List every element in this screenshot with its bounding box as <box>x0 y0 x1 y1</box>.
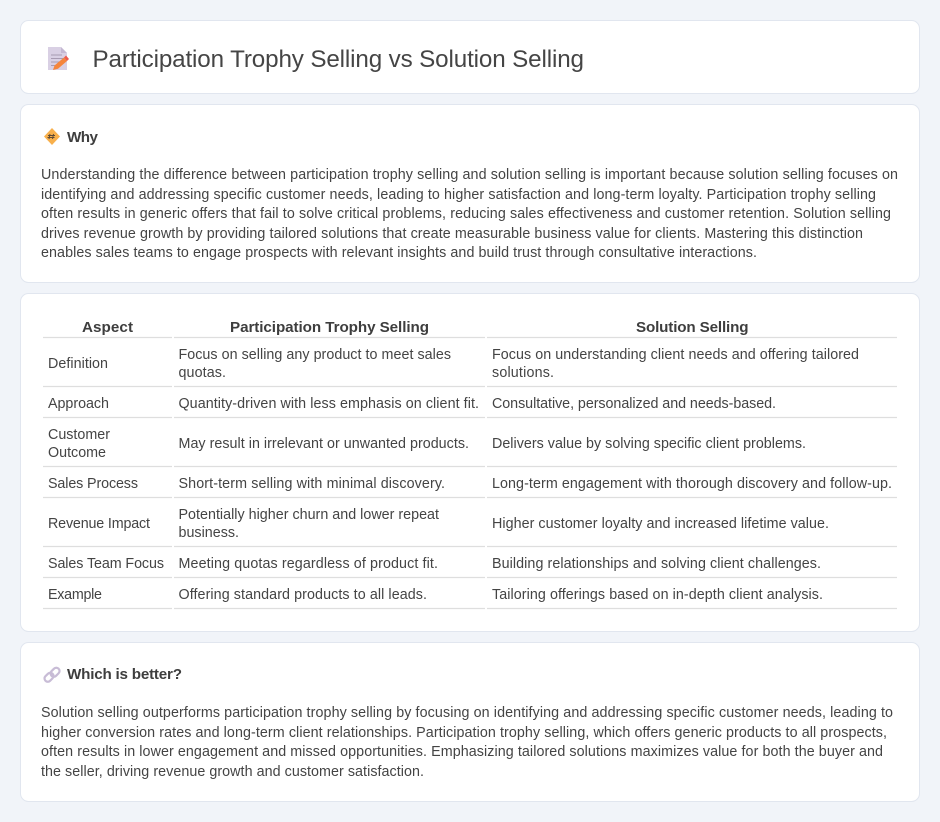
text block: why explanation <box>41 167 898 261</box>
text block: why explanation: identifying and addressing specific customer needs, leading to higher satisfaction and long-term loyalty. Participation trophy selling <box>41 187 876 203</box>
text block: verdict: Solution selling outperforms participation trophy selling by focusing on identifying and addressing specific customer needs, leading to <box>41 705 893 721</box>
icon: document with pencil <box>48 47 69 70</box>
panel: comparison table <box>20 294 920 632</box>
text block: why explanation: drives revenue growth by providing tailored solutions that create measurable business value for clients. Mastering this distinction <box>41 226 863 242</box>
row: definition: Focus on understanding client needs and offering tailored <box>492 347 859 363</box>
row: revenue impact: Potentially higher churn and lower repeat <box>178 507 439 523</box>
row: customer outcome <box>48 427 806 461</box>
table header row: Solution Selling <box>636 319 748 336</box>
heading: why: Why <box>67 129 99 146</box>
row: definition: Focus on selling any product to meet sales <box>178 347 451 363</box>
row: example <box>48 587 823 603</box>
row: definition <box>48 347 859 381</box>
row: sales team focus: Sales Team Focus <box>48 556 164 572</box>
row: revenue impact: business. <box>178 525 239 541</box>
row: approach <box>48 396 776 412</box>
row: sales process <box>48 476 892 492</box>
row: definition: quotas. <box>178 365 226 381</box>
panel: why <box>20 104 920 282</box>
row: example: Offering standard products to all leads. <box>178 587 427 603</box>
row: customer outcome: Delivers value by solving specific client problems. <box>492 436 806 452</box>
row: customer outcome: Outcome <box>48 445 106 461</box>
row: approach: Approach <box>48 396 109 412</box>
row: sales team focus <box>48 556 821 572</box>
row: definition: Definition <box>48 356 108 372</box>
table header row: Aspect <box>82 319 133 336</box>
row: revenue impact: Revenue Impact <box>48 516 150 532</box>
row: sales team focus: Building relationships and solving client challenges. <box>492 556 821 572</box>
row: example: Example <box>48 587 102 603</box>
text block: why explanation: often results in generic offers that fail to solve critical problems, reducing sales effectiveness and customer retention. Solution selling <box>41 206 891 222</box>
text block: why explanation: enables sales teams to engage prospects with relevant insights and build trust through consultative interactions. <box>41 245 757 261</box>
row: approach: Quantity-driven with less emphasis on client fit. <box>178 396 479 412</box>
icon: chain link <box>43 666 61 683</box>
table header row: Participation Trophy Selling <box>230 319 429 336</box>
text block: verdict <box>41 705 893 780</box>
text block: verdict: the seller, driving revenue growth and customer satisfaction. <box>41 764 424 780</box>
row: example: Tailoring offerings based on in-depth client analysis. <box>492 587 823 603</box>
row: sales process: Short-term selling with minimal discovery. <box>178 476 445 492</box>
row: revenue impact <box>48 507 829 541</box>
row: sales process: Sales Process <box>48 476 138 492</box>
row: customer outcome: May result in irrelevant or unwanted products. <box>178 436 469 452</box>
row: approach: Consultative, personalized and needs-based. <box>492 396 776 412</box>
text block: verdict: higher conversion rates and long-term client relationships. Participation trophy selling, which offers generic products to all prospects, <box>41 725 887 741</box>
panel: which is better <box>20 642 920 802</box>
row: revenue impact: Higher customer loyalty and increased lifetime value. <box>492 516 829 532</box>
row: customer outcome: Customer <box>48 427 110 443</box>
row: sales process: Long-term engagement with thorough discovery and follow-up. <box>492 476 892 492</box>
row: sales team focus: Meeting quotas regardless of product fit. <box>178 556 438 572</box>
table header row <box>82 319 748 336</box>
panel: title header <box>20 20 920 94</box>
text block: why explanation: Understanding the difference between participation trophy selling and solution selling is important because solution selling focuses on <box>41 167 898 183</box>
icon: warning diamond <box>44 128 60 145</box>
heading: which is better: Which is better? <box>67 666 182 683</box>
text block: verdict: often results in lower engagement and missed opportunities. Emphasizing tailored solutions maximizes value for both the buyer and <box>41 744 883 760</box>
row: definition: solutions. <box>492 365 554 381</box>
title: Participation Trophy Selling vs Solution Selling <box>92 46 584 73</box>
